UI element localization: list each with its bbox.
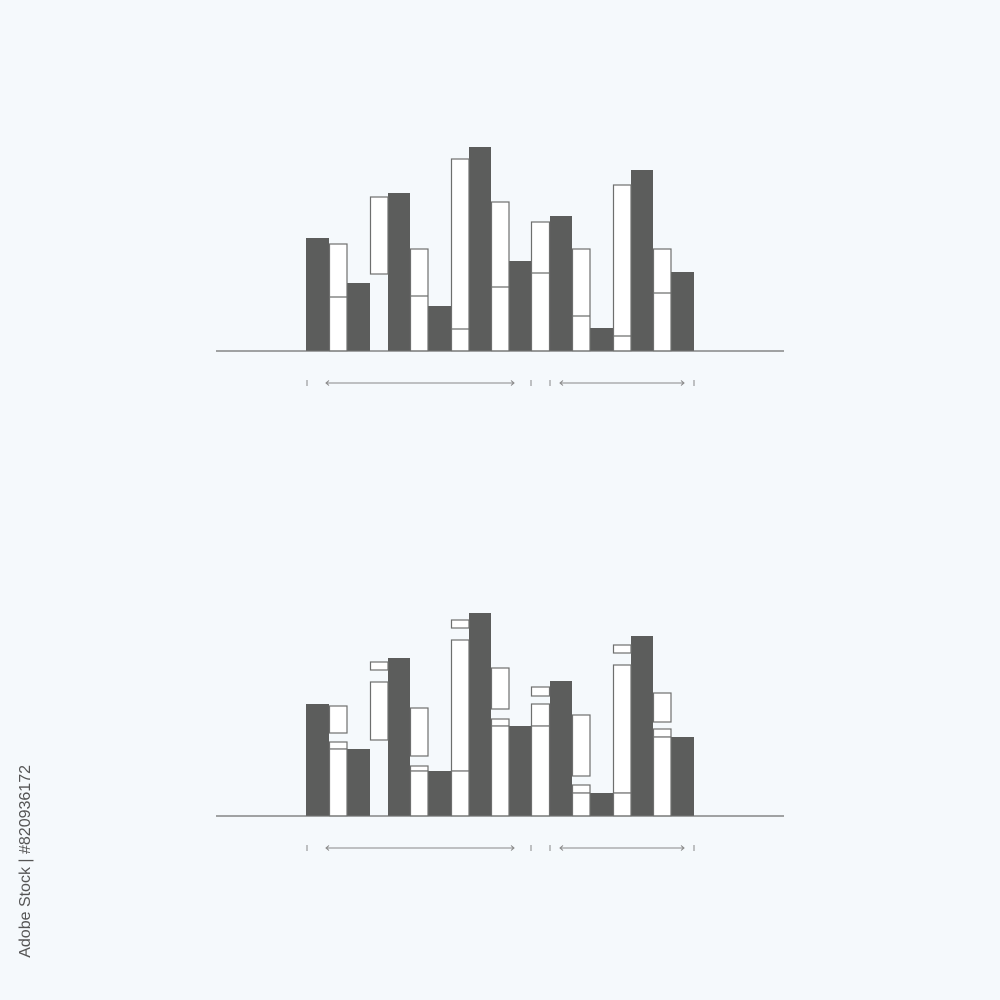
outline bars (330, 159, 671, 351)
outline bars with caps (330, 620, 671, 816)
range arrows (307, 380, 694, 386)
baseline (216, 815, 784, 817)
dark bars (306, 613, 694, 816)
watermark id text: Adobe Stock | #820936172 (17, 765, 34, 958)
chart: top bar chart (216, 147, 784, 386)
range arrows (307, 845, 694, 851)
chart: bottom bar chart (216, 613, 784, 851)
dark bars (306, 147, 694, 351)
baseline (216, 350, 784, 352)
